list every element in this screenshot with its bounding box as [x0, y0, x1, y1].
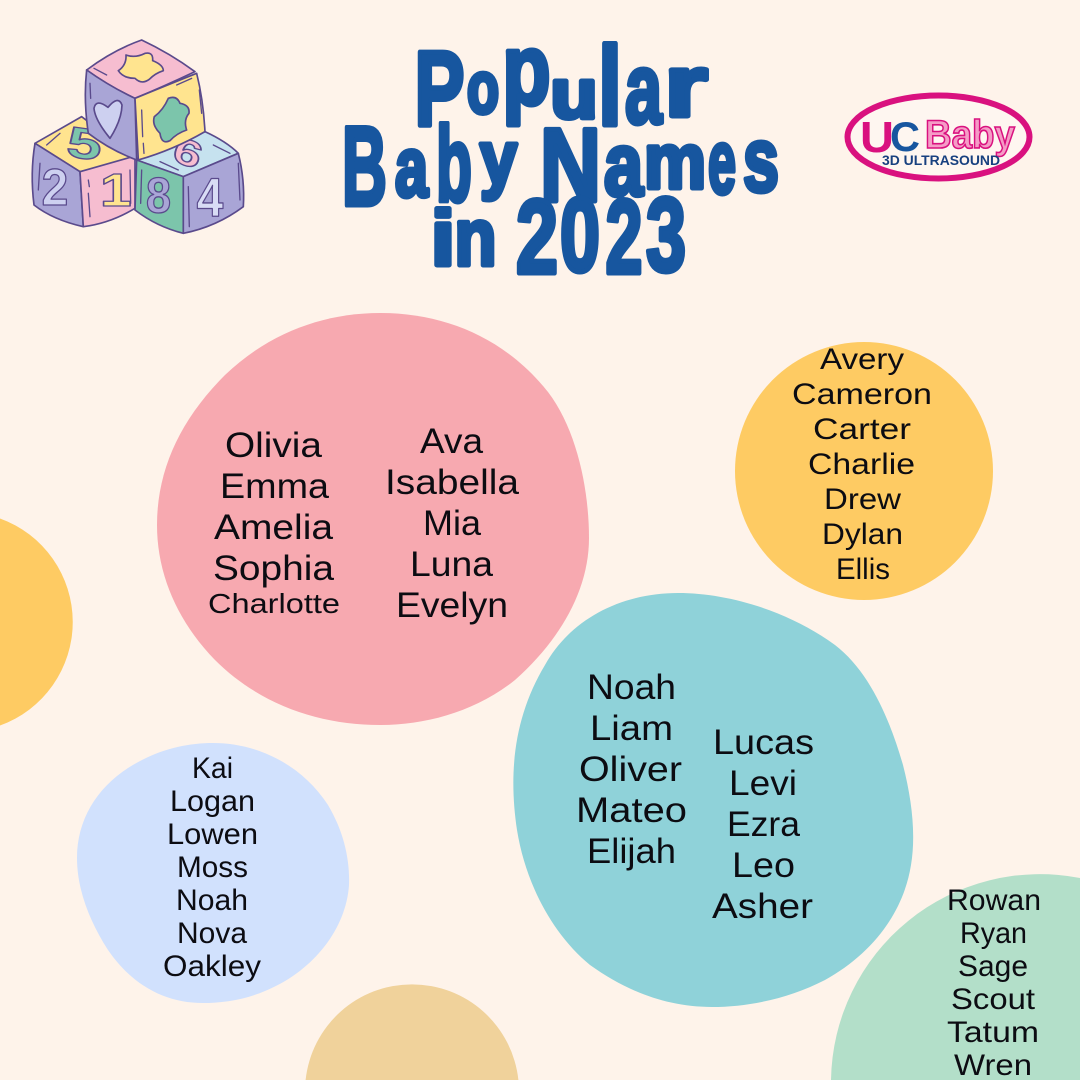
- panel: yellow circle neutral names: Drew: [824, 483, 901, 516]
- panel: pink blob girl names: [157, 313, 589, 725]
- panel: light blue blob names: Kai: [192, 752, 233, 785]
- block digits: 4: [197, 166, 224, 228]
- panel: light blue blob names: Noah: [176, 884, 248, 917]
- panel: light blue blob names: Oakley: [163, 950, 261, 983]
- title: [342, 14, 779, 296]
- title: n: [454, 193, 496, 283]
- panel: pink blob girl names: Luna: [410, 545, 494, 584]
- title: r: [664, 38, 708, 135]
- panel: green circle names: [831, 874, 1080, 1080]
- panel: light blue blob names: Lowen: [167, 818, 258, 851]
- panel: green circle names: Scout: [951, 983, 1036, 1016]
- panel: pink blob girl names: Olivia: [225, 426, 323, 465]
- icon: star on top block: [118, 53, 163, 82]
- title: b: [436, 104, 472, 224]
- panel: teal blob boy names: Oliver: [579, 750, 682, 789]
- title: P: [414, 30, 464, 148]
- panel: yellow circle neutral names: Dylan: [822, 518, 903, 551]
- panel: teal blob boy names: [513, 593, 913, 1007]
- panel: pink blob girl names: Charlotte: [208, 588, 340, 619]
- title: y: [480, 116, 517, 201]
- logo: UC Baby 3D Ultrasound: Baby: [925, 113, 1016, 157]
- title: l: [598, 24, 622, 149]
- block digits: 2: [42, 158, 68, 216]
- panel: yellow circle neutral names: Avery: [820, 343, 904, 376]
- panel: light blue blob names: Logan: [170, 785, 255, 818]
- title: a: [395, 120, 429, 214]
- block edge dashes: [38, 68, 240, 227]
- panel: teal blob boy names: Liam: [590, 709, 673, 748]
- block digits: 1: [100, 164, 132, 216]
- panel: green circle names: Ryan: [960, 917, 1027, 950]
- panel: yellow circle neutral names: Charlie: [808, 448, 915, 481]
- decorative blob: bottom tan circle: [306, 984, 518, 1080]
- title: 2: [606, 179, 642, 296]
- block digits: 8: [146, 168, 171, 224]
- panel: light blue blob names: Moss: [177, 851, 248, 884]
- title: s: [743, 110, 779, 211]
- title: B: [342, 104, 387, 229]
- panel: yellow circle neutral names: Cameron: [792, 378, 932, 411]
- logo: UC Baby 3D Ultrasound: C: [890, 113, 920, 160]
- title: a: [625, 33, 663, 145]
- panel: teal blob boy names: Mateo: [576, 791, 687, 830]
- panel: pink blob girl names: Evelyn: [396, 586, 508, 625]
- panel: teal blob boy names: Leo: [732, 846, 795, 885]
- title: u: [550, 55, 598, 133]
- panel: teal blob boy names: Elijah: [587, 832, 676, 871]
- panel: teal blob boy names: Levi: [729, 764, 797, 803]
- title: o: [467, 48, 499, 129]
- panel: pink blob girl names: Ava: [420, 422, 484, 461]
- panel: pink blob girl names: Isabella: [385, 463, 520, 502]
- icon: teal blob on block: [154, 97, 189, 142]
- icon: heart on block: [94, 101, 122, 138]
- icon: toy blocks: [32, 40, 244, 233]
- title: 0: [560, 177, 600, 294]
- panel: yellow circle neutral names: Ellis: [836, 553, 890, 586]
- title: p: [502, 14, 550, 126]
- panel: green circle names: Tatum: [947, 1016, 1039, 1049]
- panel: pink blob girl names: Mia: [423, 504, 482, 543]
- title: 2: [516, 179, 558, 296]
- logo: UC Baby 3D Ultrasound: [848, 96, 1030, 178]
- panel: light blue blob names: Nova: [177, 917, 247, 950]
- panel: teal blob boy names: Ezra: [727, 805, 801, 844]
- title: N: [540, 108, 601, 224]
- panel: green circle names: Sage: [958, 950, 1028, 983]
- decorative blob: left yellow circle: [0, 518, 73, 726]
- panel: green circle names: Rowan: [947, 884, 1041, 917]
- block digits: 5: [64, 118, 105, 171]
- title: e: [708, 112, 736, 213]
- panel: yellow circle neutral names: [735, 342, 993, 600]
- panel: teal blob boy names: Noah: [587, 668, 676, 707]
- panel: teal blob boy names: Asher: [712, 887, 813, 926]
- block digits: 6: [168, 129, 208, 177]
- panel: pink blob girl names: Emma: [220, 467, 330, 506]
- title: a: [604, 114, 644, 214]
- panel: pink blob girl names: Amelia: [214, 508, 334, 547]
- logo: UC Baby 3D Ultrasound: 3D ULTRASOUND: [882, 153, 1000, 168]
- panel: pink blob girl names: Sophia: [213, 549, 335, 588]
- title: i: [431, 194, 455, 282]
- title: m: [644, 117, 706, 205]
- panel: teal blob boy names: Lucas: [713, 723, 814, 762]
- title: 3: [646, 177, 686, 294]
- block digits: [42, 118, 224, 228]
- panel: light blue blob names: [77, 743, 349, 1003]
- logo: UC Baby 3D Ultrasound: U: [860, 113, 894, 162]
- panel: yellow circle neutral names: Carter: [813, 413, 911, 446]
